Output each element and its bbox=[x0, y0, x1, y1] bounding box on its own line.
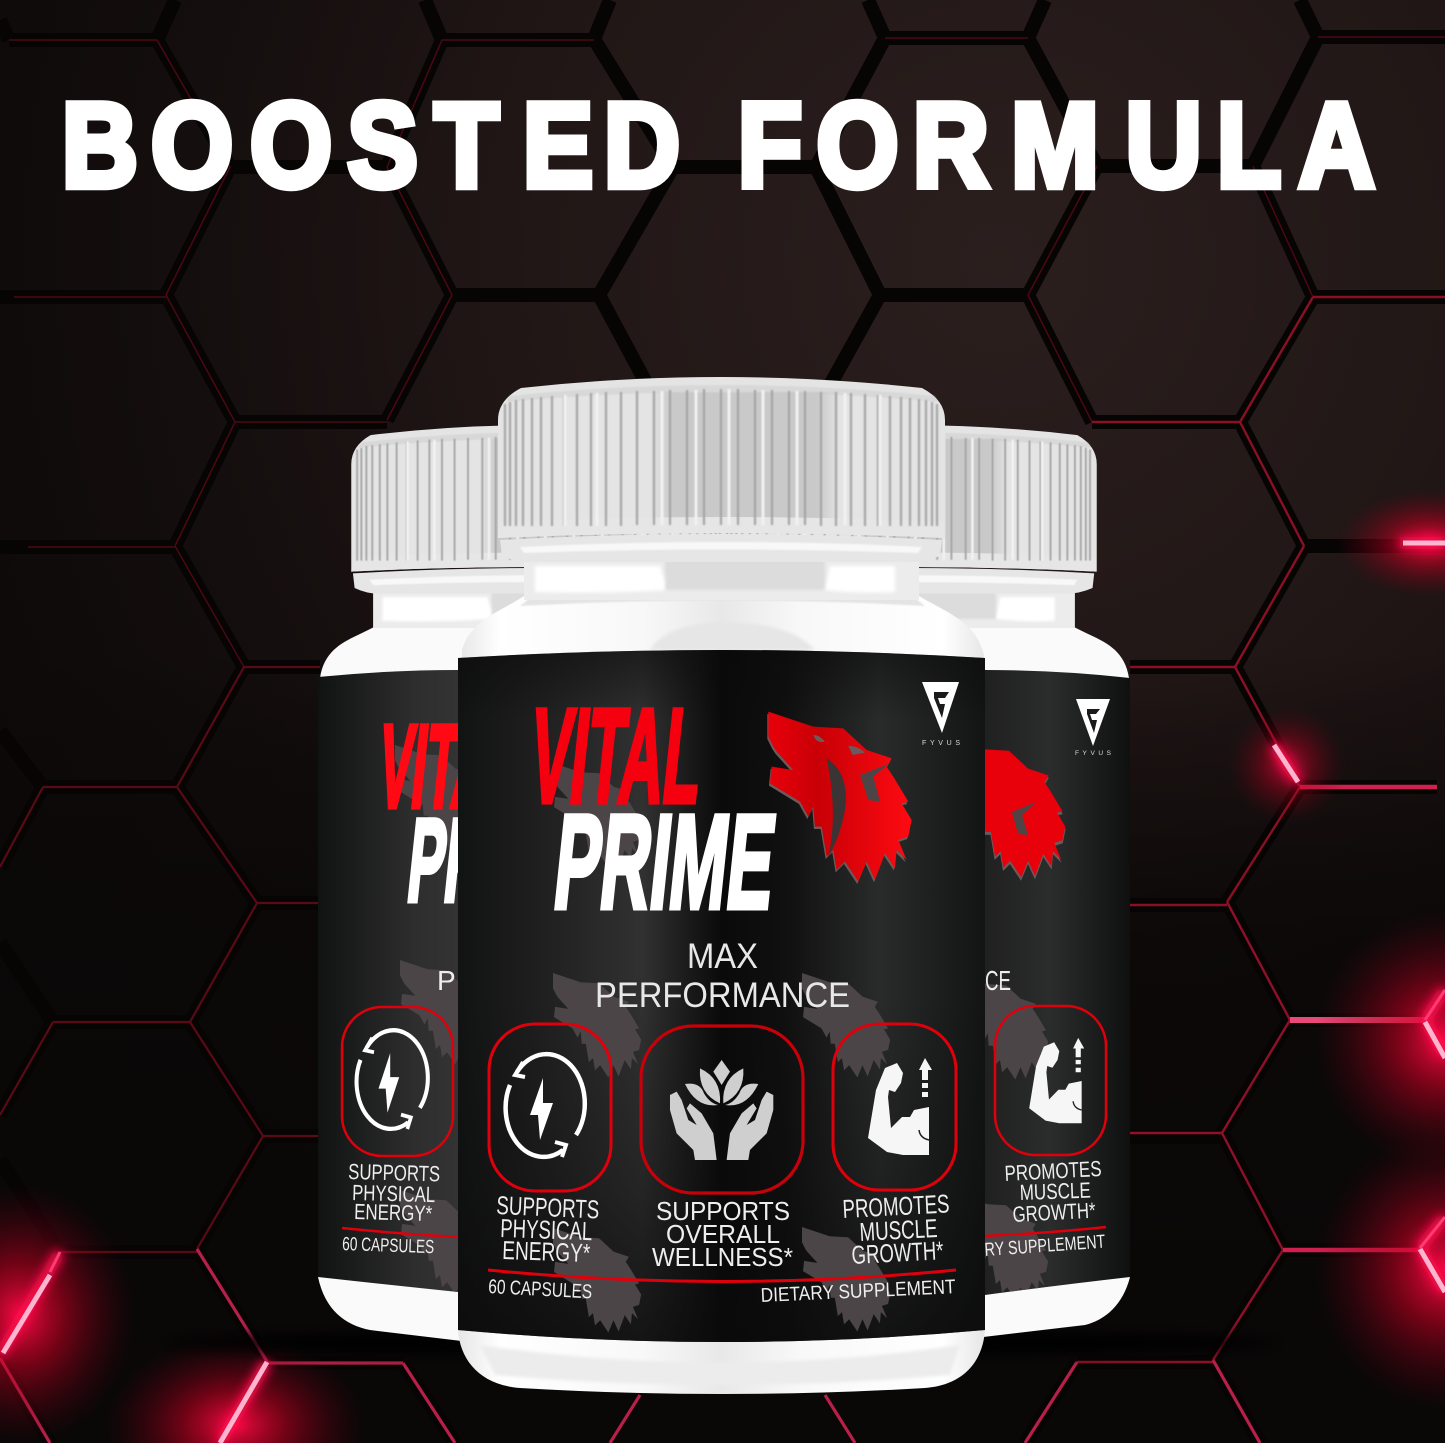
cap and neck bbox=[721, 425, 1097, 628]
tagline: PERFORMANCE bbox=[595, 976, 850, 1015]
icon bbox=[868, 1058, 932, 1155]
brand logo: FYVUS bbox=[1075, 750, 1112, 757]
floor shadow bbox=[162, 1330, 1282, 1356]
muscle caption: PROMOTES bbox=[1004, 1156, 1102, 1186]
energy caption: SUPPORTS bbox=[348, 1159, 440, 1186]
muscle badge bbox=[995, 1006, 1106, 1155]
muscle caption: GROWTH* bbox=[1012, 1198, 1096, 1227]
label bbox=[458, 650, 985, 1342]
caption: OVERALL bbox=[666, 1219, 780, 1249]
body bbox=[458, 563, 985, 1394]
capsule count: 60 CAPSULES bbox=[342, 1234, 435, 1258]
supplement note: RY SUPPLEMENT bbox=[984, 1232, 1106, 1261]
VITAL wordmark: VITAL bbox=[524, 683, 709, 832]
red wolf bbox=[985, 749, 1066, 880]
divider bbox=[342, 1228, 458, 1237]
caption: SUPPORTS bbox=[496, 1190, 600, 1224]
caption bbox=[842, 1188, 950, 1270]
energy caption bbox=[348, 1159, 440, 1226]
main bottle bbox=[458, 377, 985, 1394]
badge bbox=[489, 1024, 611, 1191]
title: BOOSTED FORMULA bbox=[62, 78, 1375, 212]
product name: VITAL bbox=[373, 702, 527, 833]
caption: SUPPORTS bbox=[656, 1196, 790, 1226]
capsule count: 60 CAPSULES bbox=[488, 1276, 593, 1303]
caption bbox=[652, 1196, 793, 1272]
supplement note: DIETARY SUPPLEMENT bbox=[760, 1276, 956, 1307]
body bbox=[318, 590, 480, 1342]
cap and neck bbox=[351, 425, 727, 628]
energy caption: PHYSICAL bbox=[352, 1180, 435, 1207]
product name: PRIME bbox=[402, 794, 590, 927]
product name bbox=[384, 723, 458, 990]
caption: ENERGY* bbox=[502, 1235, 591, 1268]
muscle caption bbox=[1004, 1156, 1102, 1227]
caption: PROMOTES bbox=[842, 1188, 950, 1224]
caption: GROWTH* bbox=[851, 1235, 944, 1270]
icon: lotus and hands bbox=[670, 1060, 773, 1160]
watermark wolves bbox=[553, 763, 890, 1333]
label: CE bbox=[985, 965, 1011, 996]
energy caption: ENERGY* bbox=[354, 1199, 433, 1226]
icon bbox=[506, 1054, 585, 1157]
caption: PHYSICAL bbox=[500, 1213, 593, 1246]
watermark wolves bbox=[395, 745, 458, 1292]
tagline: MAX bbox=[687, 937, 758, 976]
muscle icon bbox=[1029, 1038, 1084, 1123]
badge bbox=[641, 1026, 803, 1193]
neon glow accents bbox=[0, 488, 1445, 1443]
divider bbox=[488, 1270, 956, 1282]
brand logo bbox=[922, 682, 960, 747]
muscle caption: MUSCLE bbox=[1019, 1178, 1091, 1205]
label bbox=[318, 670, 458, 1292]
wellness column bbox=[641, 1026, 803, 1272]
tagline bbox=[595, 937, 850, 1015]
energy column bbox=[489, 1024, 611, 1268]
watermark wolves bbox=[985, 984, 1048, 1292]
brand logo: FYVUS bbox=[922, 740, 960, 747]
body bbox=[965, 590, 1130, 1338]
cap and neck bbox=[498, 377, 945, 600]
badge bbox=[833, 1024, 956, 1190]
product name: P bbox=[437, 965, 456, 996]
energy icon bbox=[357, 1030, 428, 1129]
brand logo bbox=[1075, 699, 1112, 757]
caption bbox=[496, 1190, 600, 1268]
back left bottle bbox=[318, 425, 727, 1342]
PRIME wordmark: PRIME bbox=[548, 787, 782, 937]
red wolf head bbox=[767, 712, 912, 884]
back right bottle bbox=[721, 425, 1130, 1338]
muscle column bbox=[833, 1024, 956, 1270]
divider bbox=[985, 1227, 1106, 1236]
caption: WELLNESS* bbox=[652, 1242, 793, 1272]
label bbox=[985, 670, 1130, 1295]
energy badge bbox=[342, 1007, 453, 1156]
caption: MUSCLE bbox=[859, 1213, 938, 1247]
